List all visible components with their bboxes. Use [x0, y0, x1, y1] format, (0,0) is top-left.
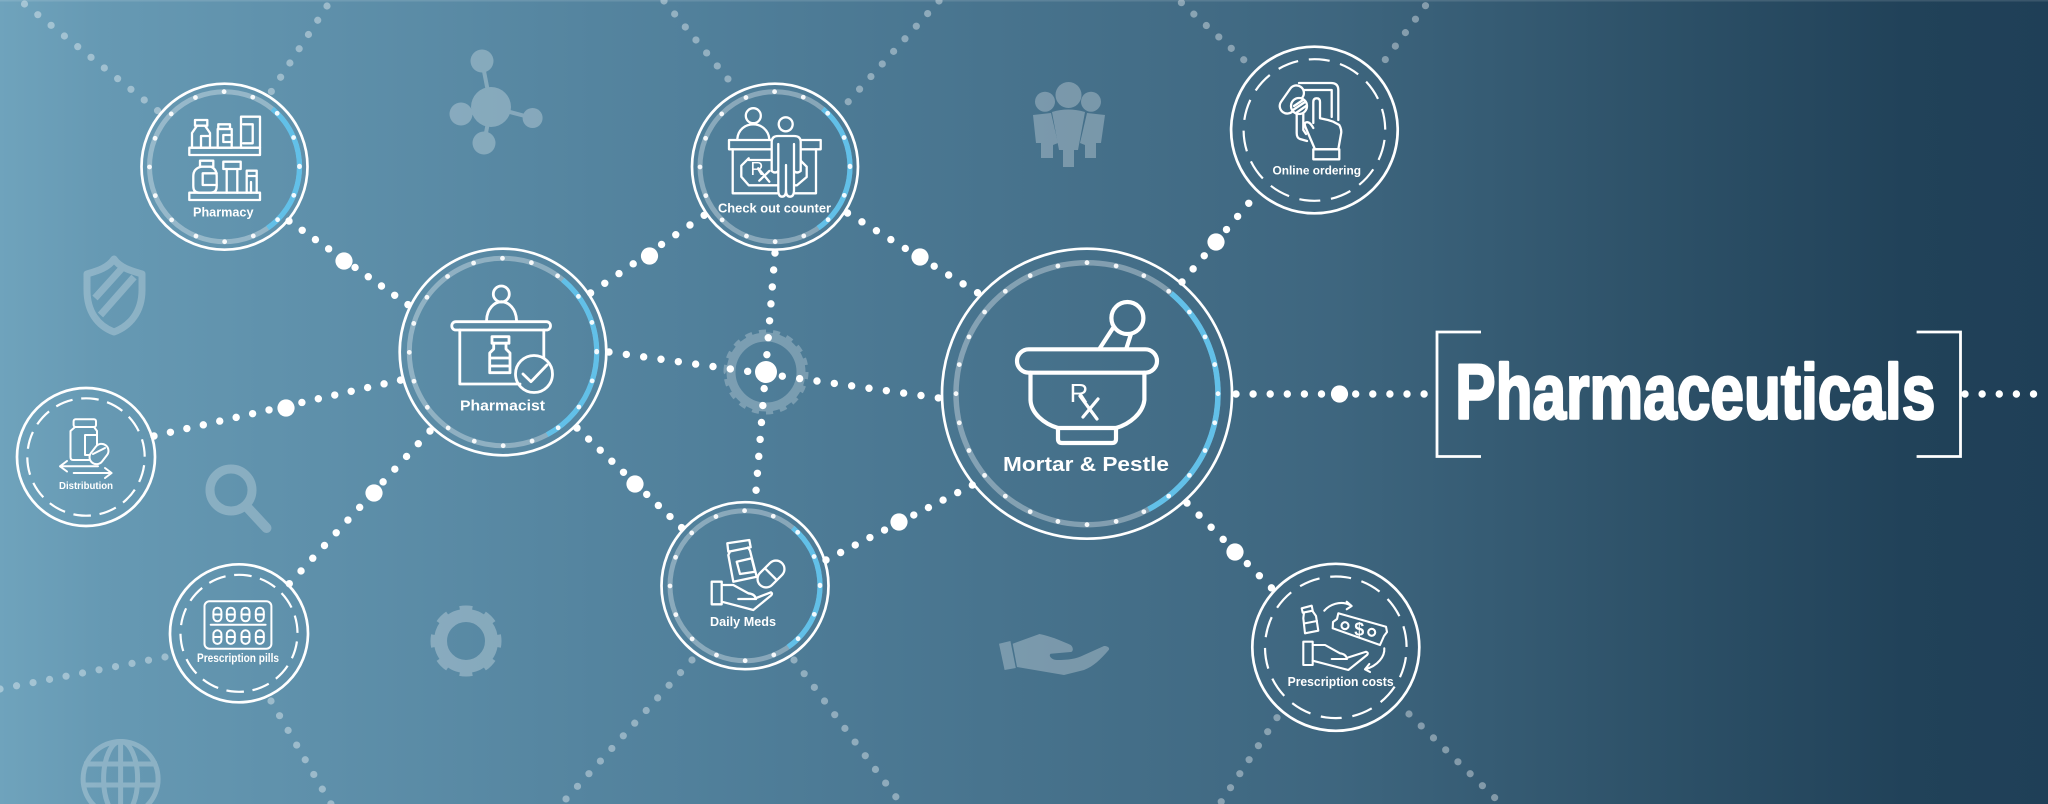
- icon: money for medicine exchange: $: [1354, 620, 1364, 640]
- title bracket: right: [1917, 332, 1960, 456]
- node: Distribution: [17, 388, 155, 526]
- node: Pharmacist: [371, 220, 635, 484]
- label: Online ordering: Online ordering: [1272, 164, 1361, 178]
- node: Daily Meds: [639, 480, 851, 691]
- icon: molecule (ghost): [450, 50, 543, 154]
- label: Pharmacy: Pharmacy: [193, 206, 254, 220]
- node: Mortar & Pestle: [902, 209, 1272, 578]
- icon: open hand (ghost): [999, 634, 1109, 675]
- label: Daily Meds: Daily Meds: [710, 615, 776, 629]
- label: Check out counter: Check out counter: [718, 200, 831, 216]
- node: Check out counter: [669, 61, 881, 272]
- node: Prescription costs: [1252, 564, 1419, 731]
- icon: gear (ghost): [434, 609, 498, 673]
- label: Distribution: Distribution: [59, 481, 113, 492]
- icon: group of people (ghost): [1033, 82, 1105, 167]
- icon: magnifier (ghost): [210, 469, 266, 528]
- icon: pharmacist at counter: [452, 286, 552, 392]
- central hub gear (ghost): [726, 332, 806, 412]
- icon: pharmacy shelves: [189, 117, 260, 200]
- label: Mortar & Pestle: Mortar & Pestle: [1003, 454, 1169, 476]
- icon: check out counter with two people: [729, 108, 821, 197]
- icon: check out counter with two people: R: [750, 159, 764, 179]
- icon: finger tapping phone with pills: [1277, 82, 1341, 159]
- node: Online ordering: [1231, 47, 1398, 213]
- title bracket: left: [1437, 332, 1481, 456]
- icon: hand receiving bottle and capsule: [712, 540, 788, 610]
- label: Prescription costs: Prescription costs: [1288, 675, 1394, 689]
- icon: money for medicine exchange: [1302, 602, 1387, 672]
- icon: globe (ghost): [83, 741, 158, 804]
- label: Prescription pills: Prescription pills: [197, 653, 279, 665]
- icon: bottle with arrows: [60, 419, 112, 478]
- node: Prescription pills: [170, 564, 308, 702]
- connector junction dots: [277, 233, 1348, 561]
- icon: mortar and pestle: R: [1070, 378, 1088, 408]
- label: Pharmacist: Pharmacist: [460, 398, 545, 414]
- bright dotted connectors: [154, 203, 2048, 588]
- faint outward dotted connectors: [0, 1, 1495, 804]
- icon: shield (ghost): [87, 259, 142, 332]
- icon: mortar and pestle: [1017, 302, 1157, 443]
- node: Pharmacy: [119, 61, 330, 272]
- icon: blister pack of pills: [204, 601, 271, 649]
